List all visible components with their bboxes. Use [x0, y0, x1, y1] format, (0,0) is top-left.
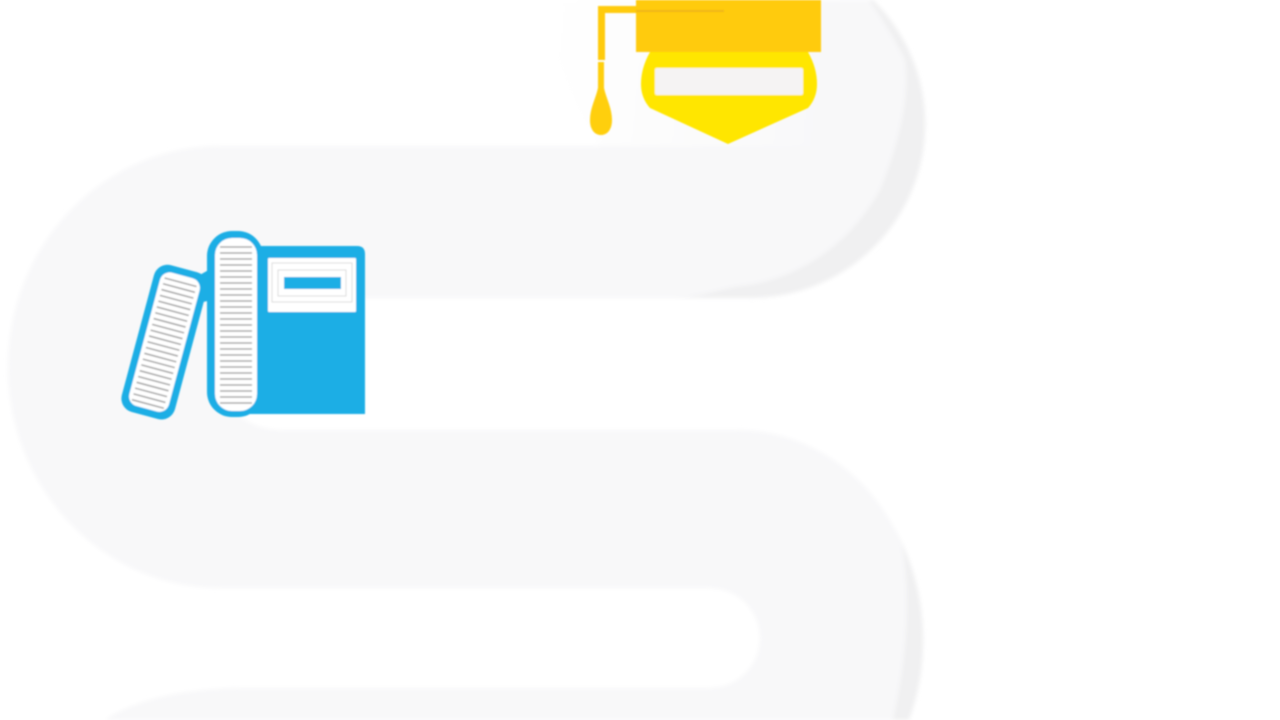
- cord line on board: [636, 10, 724, 12]
- serpentine road background: [8, 0, 925, 720]
- tassel drop: [590, 62, 612, 135]
- icon: books: [118, 231, 365, 423]
- cover label bar: [284, 277, 341, 289]
- cap strap: [641, 52, 817, 144]
- cap board: [636, 0, 821, 52]
- road shadow edge: [8, 0, 925, 720]
- leaning book: [118, 262, 211, 423]
- tassel cord: [598, 6, 640, 60]
- road surface: [8, 0, 907, 720]
- book cover: [250, 246, 365, 414]
- icon: graduation cap: [590, 0, 821, 144]
- book spine: [207, 231, 263, 417]
- cap strap slot: [655, 68, 803, 95]
- road top fade: [530, 0, 870, 146]
- book connector: [198, 268, 212, 302]
- cover label: [268, 258, 356, 312]
